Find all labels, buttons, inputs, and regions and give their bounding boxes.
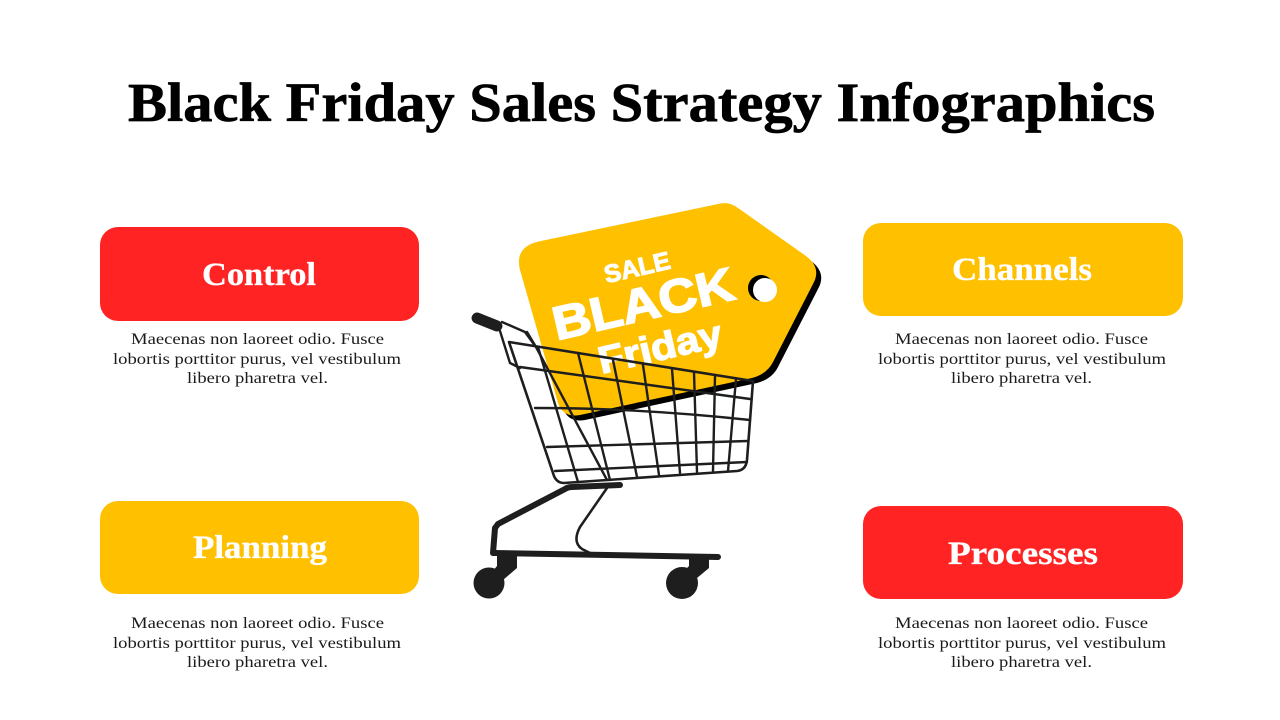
channels label box: [863, 223, 1183, 316]
cart rear wheel: [474, 568, 504, 598]
title: Black Friday Sales Strategy Infographics: [128, 72, 1155, 133]
tag hole: [748, 275, 777, 302]
channels description: Maecenas non laoreet odio. Fusce: [895, 331, 1148, 348]
tag shadow: [524, 208, 821, 420]
cart base bar: [494, 553, 718, 557]
cart chassis: [493, 485, 620, 553]
channels description: [878, 331, 1167, 387]
control description: libero pharetra vel.: [187, 370, 328, 387]
cart basket rim: [509, 342, 753, 483]
planning description: Maecenas non laoreet odio. Fusce: [131, 615, 384, 632]
tag body: [519, 203, 816, 416]
illustration: price tag in shopping cart: [474, 203, 821, 599]
icon: sale price tag: [519, 203, 821, 420]
icon: shopping cart: [474, 318, 753, 599]
planning description: lobortis porttitor purus, vel vestibulum: [113, 635, 402, 652]
processes heading: Processes: [948, 536, 1098, 572]
processes description: libero pharetra vel.: [951, 654, 1092, 671]
tag text: SALE: SALE: [601, 247, 673, 289]
panel: processes: [863, 506, 1183, 671]
channels heading: Channels: [952, 252, 1092, 288]
tag text: BLACK: BLACK: [547, 257, 739, 350]
planning label box: [100, 501, 419, 594]
cart front wheel: [666, 567, 698, 599]
processes description: [878, 615, 1167, 671]
cart handle frame: [500, 322, 607, 480]
cart handle grip: [477, 318, 497, 326]
channels description: libero pharetra vel.: [951, 370, 1092, 387]
processes label box: [863, 506, 1183, 599]
channels description: lobortis porttitor purus, vel vestibulum: [878, 351, 1167, 368]
planning description: libero pharetra vel.: [187, 654, 328, 671]
panel: planning: [100, 501, 419, 671]
cart horizontal wires: [520, 367, 750, 471]
cart vertical wires: [538, 347, 736, 482]
control description: lobortis porttitor purus, vel vestibulum: [113, 351, 402, 368]
control description: Maecenas non laoreet odio. Fusce: [131, 331, 384, 348]
processes description: Maecenas non laoreet odio. Fusce: [895, 615, 1148, 632]
processes description: lobortis porttitor purus, vel vestibulum: [878, 635, 1167, 652]
panel: channels: [863, 223, 1183, 387]
planning heading: Planning: [193, 530, 328, 566]
control description: [113, 331, 402, 387]
panel: control: [100, 227, 419, 387]
control label box: [100, 227, 419, 321]
tag text: Friday: Friday: [594, 313, 726, 383]
planning description: [113, 615, 402, 671]
cart front fork: [685, 557, 709, 578]
control heading: Control: [202, 257, 316, 293]
cart support strut: [576, 488, 607, 553]
cart rear fork: [492, 555, 517, 580]
